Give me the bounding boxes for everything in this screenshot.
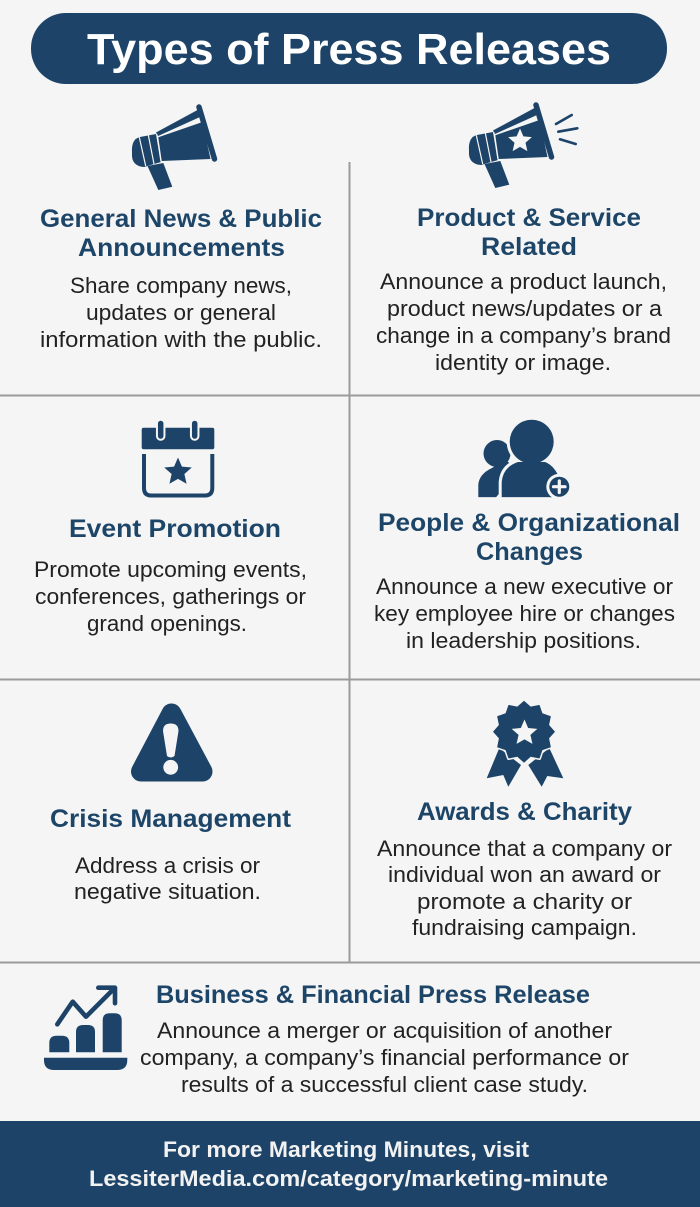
icon: growth bar chart (44, 988, 127, 1070)
text block: promote a charity or (417, 889, 632, 914)
heading (378, 509, 680, 566)
icon: megaphone with star (469, 105, 577, 188)
text block: company, a company’s financial performance or (140, 1045, 629, 1070)
icon: award ribbon (487, 701, 563, 787)
text block (376, 269, 671, 375)
icon: warning triangle (141, 714, 202, 775)
text block: information with the public. (40, 327, 322, 352)
text block (74, 853, 261, 904)
panel: business and financial (44, 981, 629, 1097)
text block (140, 1018, 629, 1097)
text block (40, 273, 322, 352)
text block: Announce a merger or acquisition of another (157, 1018, 612, 1043)
panel: product and service (376, 105, 671, 375)
heading: People & Organizational (378, 509, 680, 537)
text block: negative situation. (74, 879, 261, 904)
text block: conferences, gatherings or (35, 584, 306, 609)
panel: crisis management (50, 714, 292, 904)
icon: people with plus (470, 420, 572, 503)
title banner: Types of Press Releases (87, 25, 611, 74)
heading (40, 205, 322, 262)
title banner (31, 13, 667, 84)
text block (377, 836, 672, 940)
heading: Crisis Management (50, 805, 292, 833)
panel: awards and charity (377, 701, 672, 940)
icon: calendar (142, 424, 214, 496)
panel: general news (40, 107, 322, 352)
text block: Announce a product launch, (380, 269, 667, 294)
footer banner: LessiterMedia.com/category/marketing-minute (89, 1166, 608, 1191)
text block: results of a successful client case study. (181, 1072, 588, 1097)
icon: megaphone (132, 107, 214, 190)
panel: event promotion (34, 424, 307, 636)
text block: Address a crisis or (75, 853, 260, 878)
heading: Awards & Charity (417, 798, 632, 826)
footer banner (0, 1121, 700, 1207)
heading: Business & Financial Press Release (156, 981, 590, 1009)
text block: Announce a new executive or (376, 574, 673, 599)
text block: updates or general (86, 300, 276, 325)
text block: product news/updates or a (387, 296, 663, 321)
heading: Product & Service (417, 204, 641, 232)
heading: General News & Public (40, 205, 322, 233)
text block: in leadership positions. (406, 628, 641, 653)
text block: grand openings. (87, 611, 247, 636)
text block: Announce that a company or (377, 836, 672, 861)
text block: identity or image. (435, 350, 611, 375)
text block: key employee hire or changes (374, 601, 675, 626)
heading (417, 204, 641, 261)
footer banner: For more Marketing Minutes, visit (163, 1137, 530, 1162)
text block: change in a company’s brand (376, 323, 671, 348)
text block (34, 557, 307, 636)
text block: individual won an award or (388, 862, 661, 887)
heading: Event Promotion (69, 515, 281, 543)
text block: Promote upcoming events, (34, 557, 307, 582)
heading: Related (481, 233, 577, 261)
text block: fundraising campaign. (412, 915, 637, 940)
text block: Share company news, (70, 273, 292, 298)
heading: Announcements (78, 234, 285, 262)
heading: Changes (476, 538, 583, 566)
panel: people and organizational changes (374, 420, 680, 653)
text block (374, 574, 675, 653)
